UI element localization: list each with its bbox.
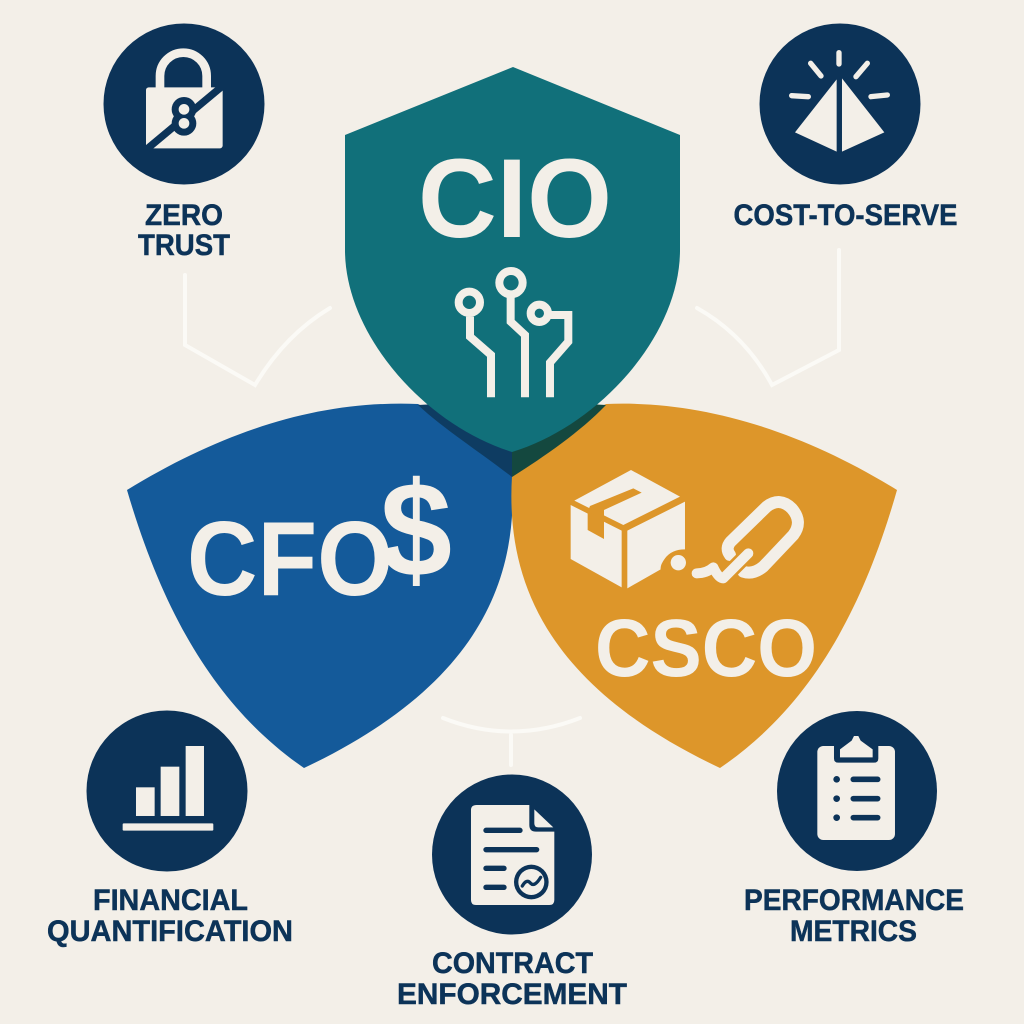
label: performance metrics: METRICS — [790, 915, 917, 948]
label: contract enforcement — [397, 947, 627, 1011]
icon: box — [571, 470, 686, 588]
icon: zero trust — [104, 24, 264, 184]
CIO label: CIO — [418, 136, 612, 261]
shield: CSCO — [511, 404, 897, 768]
label: zero trust: ZERO — [145, 199, 223, 232]
CSCO label: CSCO — [595, 603, 817, 694]
label: financial quantification — [47, 884, 293, 948]
shield: CIO — [345, 67, 680, 477]
icon: contract — [432, 774, 592, 934]
shield: CFO — [127, 404, 513, 768]
dollar sign: $ — [380, 454, 452, 605]
overlap: CSCO and CIO — [512, 400, 606, 477]
connector lines — [185, 250, 839, 765]
label: performance metrics — [744, 884, 964, 948]
overlap: CFO and CIO — [418, 400, 512, 477]
icon: financial quantification — [86, 710, 248, 872]
icon: cost-to-serve — [760, 24, 920, 184]
label: contract enforcement: CONTRACT — [432, 947, 593, 980]
label: financial quantification: FINANCIAL — [93, 884, 248, 917]
shield body — [345, 67, 680, 452]
label: financial quantification: QUANTIFICATION — [47, 915, 293, 948]
label: zero trust — [138, 199, 230, 262]
label: zero trust: TRUST — [138, 229, 230, 262]
icon: chain link — [697, 502, 798, 578]
icon: circuit — [459, 271, 568, 397]
label: contract enforcement: ENFORCEMENT — [397, 978, 627, 1011]
CFO label: CFO — [187, 500, 393, 618]
icon: performance metrics — [777, 711, 937, 871]
label: performance metrics: PERFORMANCE — [744, 884, 964, 917]
label: cost-to-serve: COST-TO-SERVE — [734, 199, 958, 232]
